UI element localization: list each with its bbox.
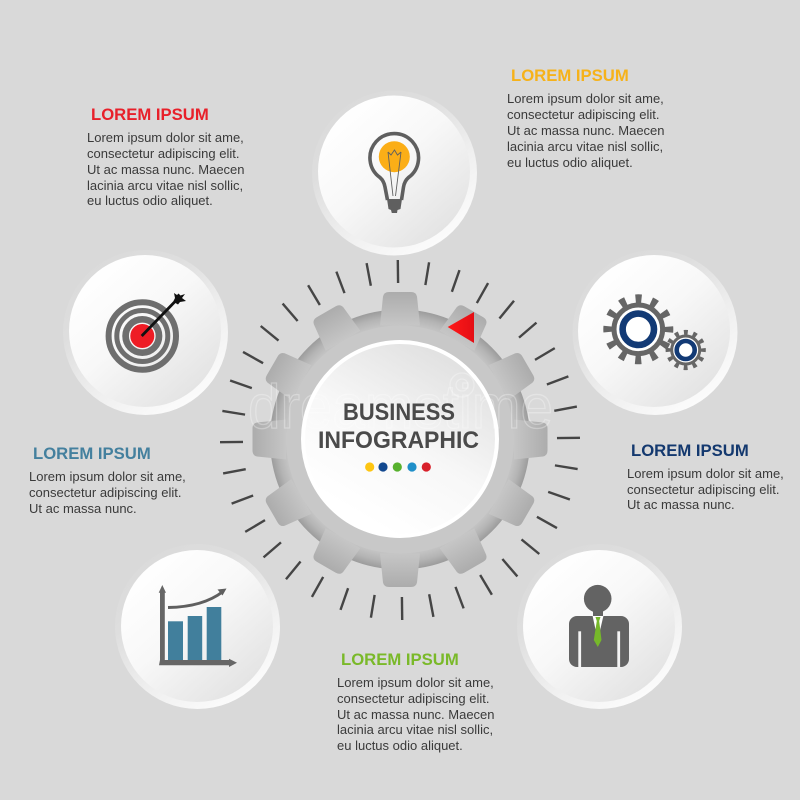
- text block: green: lacinia arcu vitae nisl sollic,: [337, 722, 493, 737]
- colored dots: [365, 462, 431, 472]
- text block: navy: Ut ac massa nunc.: [627, 497, 735, 512]
- text block: red: Lorem ipsum dolor sit ame,: [87, 130, 244, 145]
- text block: red: [87, 105, 245, 208]
- central gear: [252, 292, 548, 587]
- center title: INFOGRAPHIC: [318, 427, 479, 454]
- text block: red: Ut ac massa nunc. Maecen: [87, 162, 245, 177]
- panel: target circle: [63, 250, 228, 415]
- text block: steel blue: Ut ac massa nunc.: [29, 501, 137, 516]
- text block: yellow: lacinia arcu vitae nisl sollic,: [507, 139, 663, 154]
- text block: steel blue: consectetur adipiscing elit.: [29, 485, 181, 500]
- icon: businessman: [569, 585, 629, 667]
- text block: green: [337, 650, 495, 753]
- icon: gears: [608, 299, 703, 367]
- icon: bar chart: [159, 585, 237, 667]
- center title: BUSINESS: [343, 399, 455, 426]
- text block: green: consectetur adipiscing elit.: [337, 691, 489, 706]
- text block: steel blue: Lorem ipsum dolor sit ame,: [29, 469, 186, 484]
- text block: green: Ut ac massa nunc. Maecen: [337, 707, 495, 722]
- center disc: [303, 342, 497, 536]
- red triangle pointer: [448, 312, 474, 343]
- text block: red: lacinia arcu vitae nisl sollic,: [87, 178, 243, 193]
- text block: navy: LOREM IPSUM: [631, 441, 749, 460]
- icon: target with arrow: [109, 293, 186, 370]
- panel: gears circle: [572, 250, 738, 415]
- text block: red: LOREM IPSUM: [91, 105, 209, 124]
- text block: yellow: Lorem ipsum dolor sit ame,: [507, 91, 664, 106]
- radial tick marks: [218, 258, 582, 622]
- icon: lightbulb: [370, 134, 419, 213]
- gear recessed ring: [270, 310, 530, 570]
- panel: businessman circle: [517, 544, 682, 709]
- text block: green: Lorem ipsum dolor sit ame,: [337, 675, 494, 690]
- text block: green: LOREM IPSUM: [341, 650, 459, 669]
- text block: steel blue: [29, 444, 186, 516]
- text block: yellow: Ut ac massa nunc. Maecen: [507, 123, 665, 138]
- text block: yellow: LOREM IPSUM: [511, 66, 629, 85]
- text block: yellow: [507, 66, 665, 170]
- text block: navy: [627, 441, 784, 512]
- text block: navy: Lorem ipsum dolor sit ame,: [627, 466, 784, 481]
- text block: yellow: consectetur adipiscing elit.: [507, 107, 659, 122]
- center title: [318, 399, 479, 454]
- text block: red: eu luctus odio aliquet.: [87, 193, 213, 208]
- panel: lightbulb circle: [312, 90, 477, 256]
- text block: steel blue: LOREM IPSUM: [33, 444, 151, 463]
- gear inner body: [286, 326, 514, 554]
- text block: navy: consectetur adipiscing elit.: [627, 482, 779, 497]
- gear teeth: [252, 292, 548, 587]
- watermark: dreamstime: [248, 373, 553, 442]
- text block: yellow: eu luctus odio aliquet.: [507, 155, 633, 170]
- panel: bar chart circle: [115, 544, 280, 709]
- text block: green: eu luctus odio aliquet.: [337, 738, 463, 753]
- text block: red: consectetur adipiscing elit.: [87, 146, 239, 161]
